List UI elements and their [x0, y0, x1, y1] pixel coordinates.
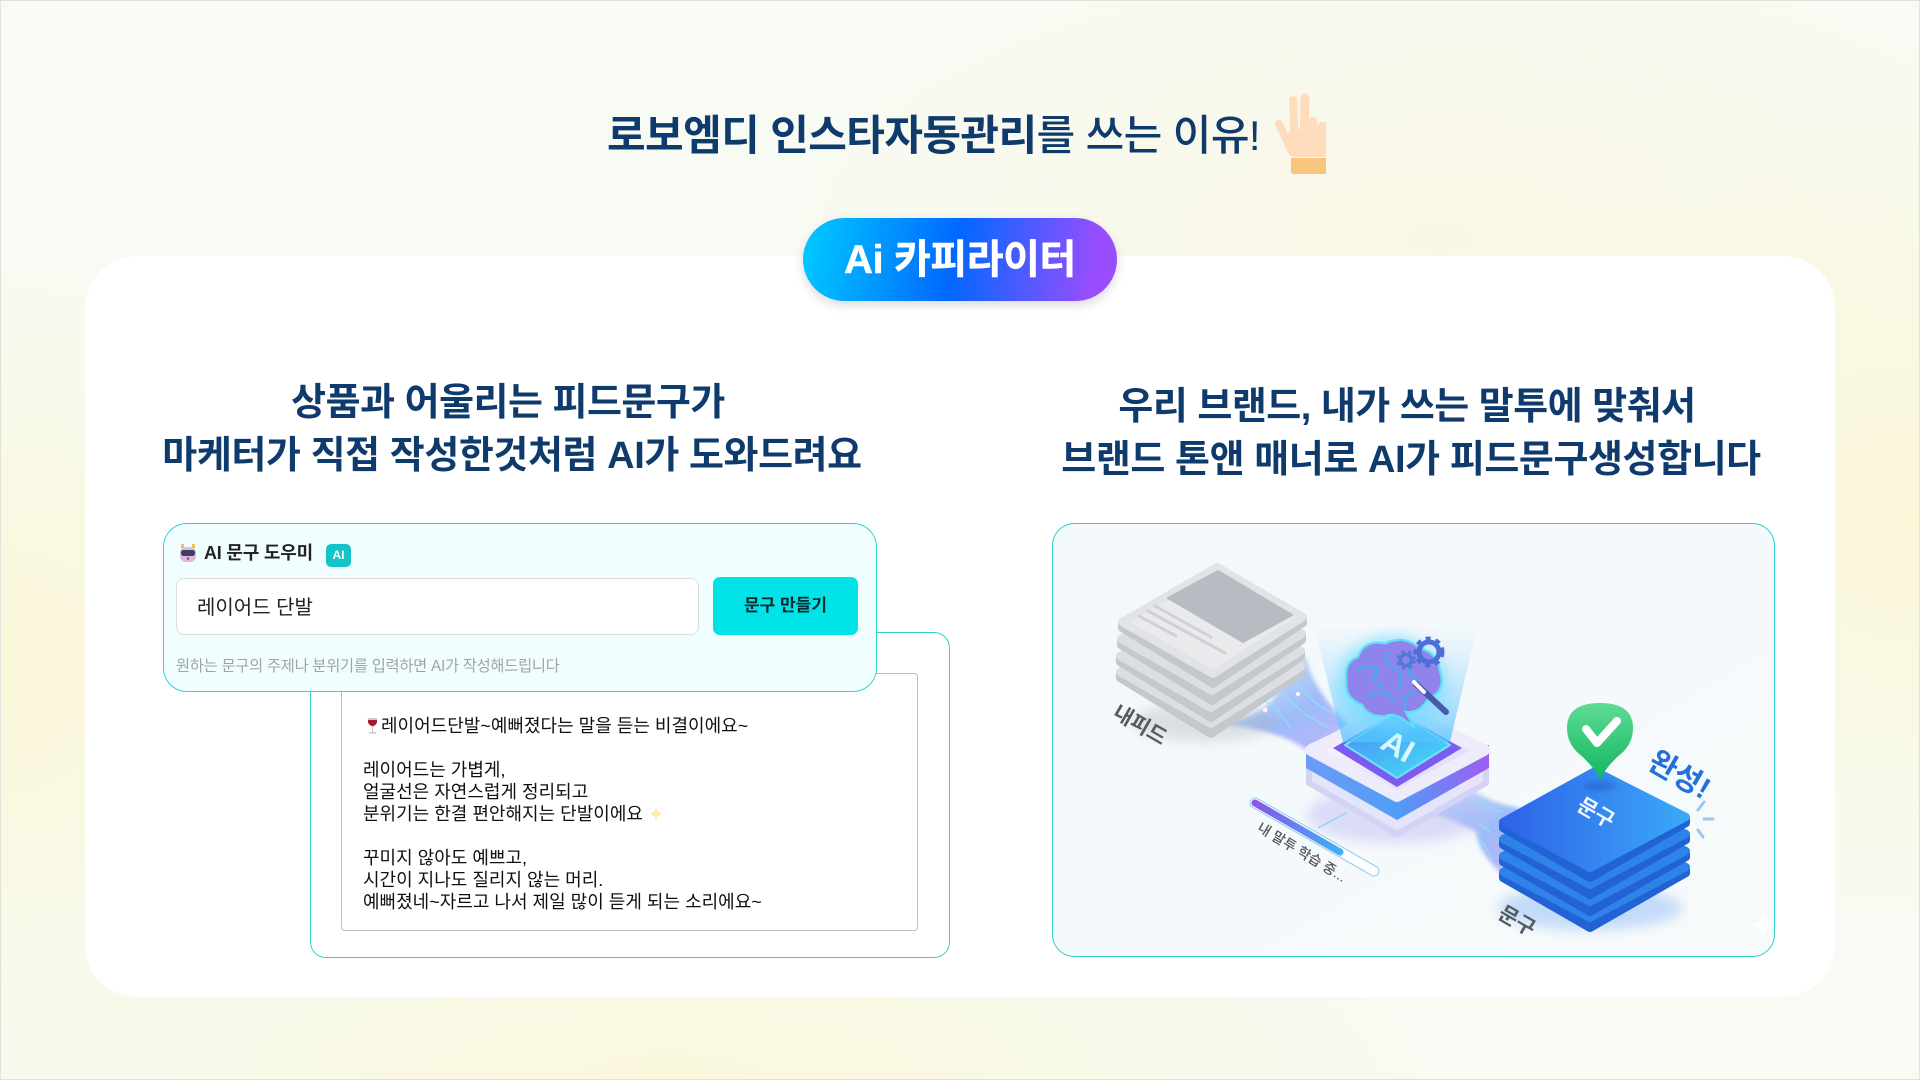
AI chip label: AI — [1375, 722, 1421, 770]
label on stack: 문구 — [1573, 794, 1618, 833]
data flow: AI to copy — [1428, 784, 1520, 874]
input field: 레이어드 단발 — [197, 597, 313, 619]
AI server — [1306, 709, 1489, 843]
light beam — [1315, 623, 1478, 742]
icon: brain with gears and wand — [1336, 635, 1448, 731]
generated copy text: 레이어드는 가볍게, — [363, 760, 505, 780]
generated copy text box — [341, 673, 918, 931]
data flow: feed to AI — [1216, 656, 1348, 754]
AI badge: AI — [332, 548, 344, 562]
generated copy text — [363, 716, 762, 912]
heading: left: 마케터가 직접 작성한것처럼 AI가 도와드려요 — [162, 434, 862, 476]
title: 로보엠디 인스타자동관리를 쓰는 이유! — [607, 112, 1260, 158]
panel: generated copy card — [310, 632, 950, 958]
icon: green check pin — [1567, 703, 1633, 791]
label: copy: 문구 — [1494, 902, 1539, 941]
label: learning my tone: 내 말투 학습 중... — [1255, 819, 1349, 885]
button — [713, 577, 858, 635]
badge: Ai 카피라이터 — [803, 218, 1117, 301]
panel: AI copy helper — [163, 523, 877, 692]
input field — [176, 578, 699, 635]
heading: left — [162, 382, 862, 476]
generated copy text: 꾸미지 않아도 예쁘고, — [363, 848, 527, 868]
helper title: AI 문구 도우미 — [204, 543, 313, 563]
button: 문구 만들기 — [744, 596, 827, 615]
icon: robot — [180, 544, 196, 562]
stack: my feed — [1120, 567, 1303, 742]
label: my feed: 내피드 — [1109, 701, 1171, 750]
progress bar — [1255, 803, 1374, 871]
generated copy text: 예뻐졌네~자르고 나서 제일 많이 듣게 되는 소리에요~ — [363, 892, 762, 912]
AI badge — [326, 544, 351, 567]
generated copy text: 분위기는 한결 편안해지는 단발이에요 — [363, 804, 643, 824]
generated copy text: 레이어드단발~예뻐졌다는 말을 듣는 비결이에요~ — [381, 716, 748, 736]
heading: right — [1061, 386, 1761, 480]
generated copy text: 얼굴선은 자연스럽게 정리되고 — [363, 782, 588, 802]
badge: Ai 카피라이터: Ai 카피라이터 — [844, 238, 1076, 282]
generated copy text: 시간이 지나도 질리지 않는 머리. — [363, 870, 603, 890]
heading: left: 상품과 어울리는 피드문구가 — [291, 382, 725, 424]
label: done: 완성! — [1643, 745, 1716, 806]
illustration frame — [1052, 524, 1774, 956]
panel: white card — [85, 256, 1835, 997]
sparks — [1698, 802, 1713, 837]
heading: right: 우리 브랜드, 내가 쓰는 말투에 맞춰서 — [1118, 386, 1696, 428]
stack: copy — [1498, 771, 1686, 930]
icon: raised hand — [1275, 94, 1326, 174]
corner sparkle — [1753, 913, 1773, 937]
hint text: 원하는 문구의 주제나 분위기를 입력하면 AI가 작성해드립니다 — [176, 658, 560, 675]
heading: right: 브랜드 톤앤 매너로 AI가 피드문구생성합니다 — [1061, 438, 1761, 480]
